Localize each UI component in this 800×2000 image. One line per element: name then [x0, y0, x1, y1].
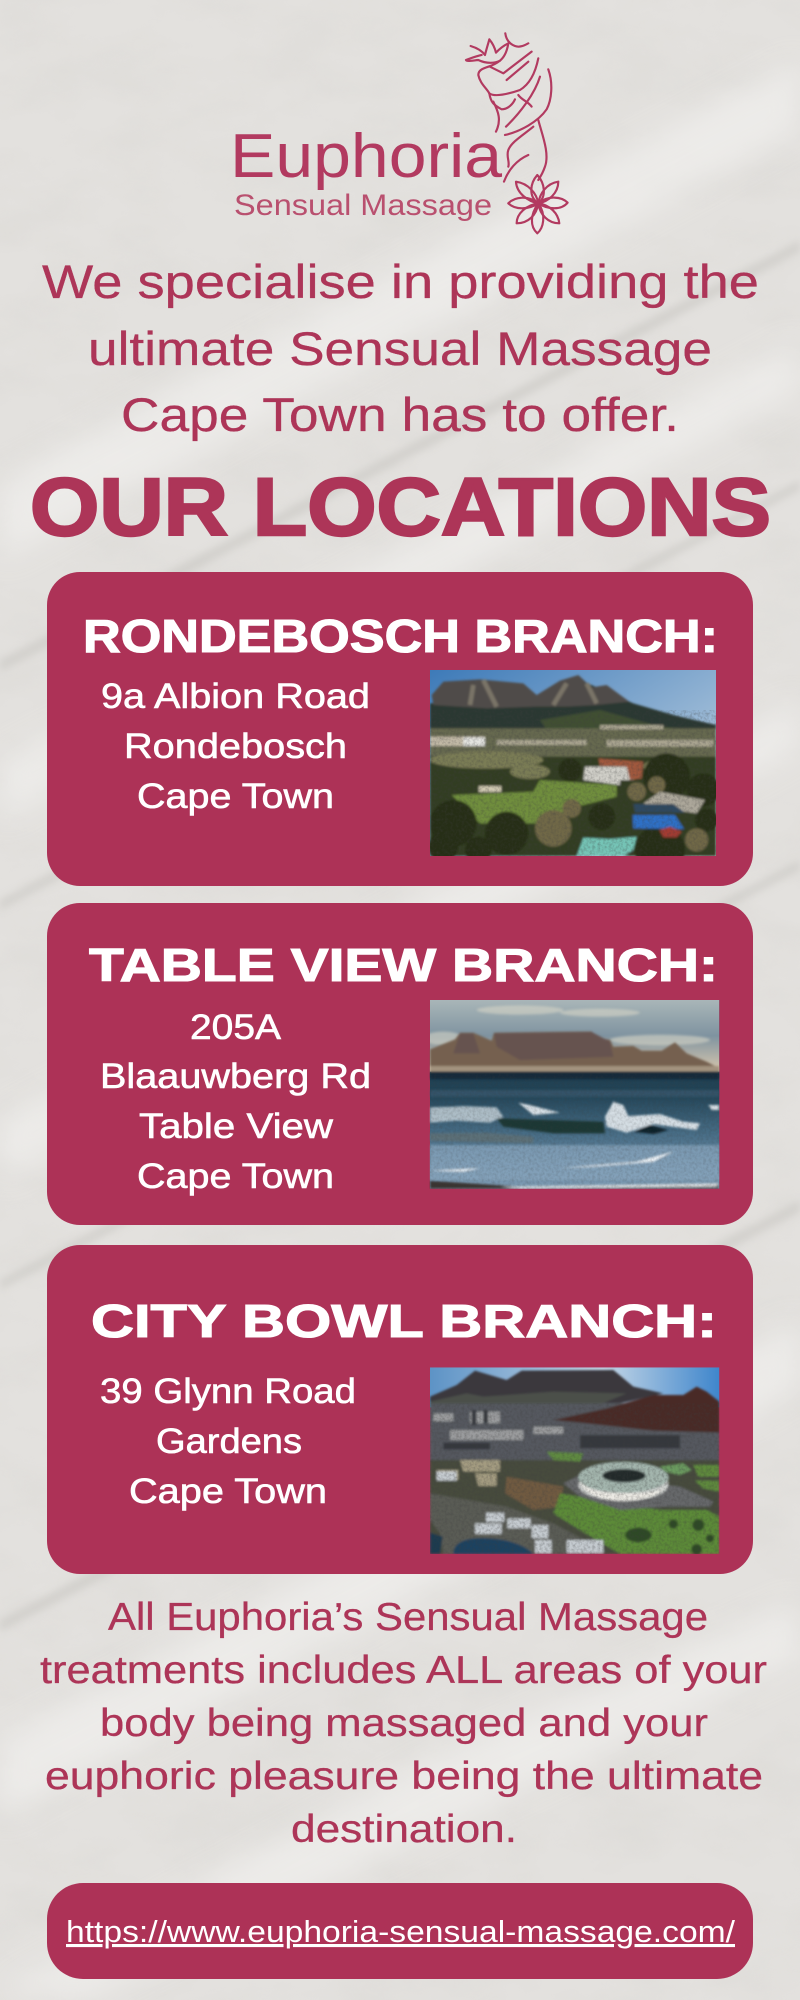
logo — [230, 33, 568, 233]
address: Cape Town — [137, 777, 334, 816]
photo: Cape Town stadium aerial view — [430, 1367, 719, 1555]
closing paragraph: destination. — [291, 1808, 517, 1851]
address: 9a Albion Road — [101, 677, 370, 716]
branch heading: CITY BOWL BRANCH: — [91, 1295, 717, 1347]
intro text — [42, 255, 759, 441]
website link pill — [47, 1883, 753, 1979]
closing paragraph: All Euphoria’s Sensual Massage — [108, 1596, 708, 1639]
address — [100, 1372, 356, 1511]
photo: Rondebosch aerial view — [430, 670, 716, 856]
logo tagline: Sensual Massage — [234, 189, 492, 222]
closing paragraph: body being massaged and your — [100, 1702, 708, 1745]
closing paragraph — [40, 1596, 767, 1851]
panel: Rondebosch branch — [47, 572, 753, 886]
address: Gardens — [156, 1422, 302, 1461]
address — [100, 1008, 371, 1196]
address: Cape Town — [137, 1157, 334, 1196]
logo wordmark: Euphoria — [230, 122, 503, 191]
panel: City Bowl branch — [47, 1245, 753, 1574]
address: 205A — [190, 1008, 282, 1047]
main heading: OUR LOCATIONS — [30, 462, 771, 553]
intro text: We specialise in providing the — [42, 255, 759, 308]
branch heading: RONDEBOSCH BRANCH: — [83, 610, 718, 662]
intro text: ultimate Sensual Massage — [88, 322, 712, 375]
logo figure icon — [466, 33, 568, 233]
address: Table View — [139, 1107, 334, 1146]
address: Cape Town — [129, 1472, 327, 1511]
closing paragraph: euphoric pleasure being the ultimate — [45, 1755, 763, 1798]
address: 39 Glynn Road — [100, 1372, 356, 1411]
panel: Table View branch — [47, 903, 753, 1225]
closing paragraph: treatments includes ALL areas of your — [40, 1649, 767, 1692]
address — [101, 677, 370, 816]
photo: Table Mountain from the sea — [423, 1000, 719, 1189]
branch heading: TABLE VIEW BRANCH: — [89, 939, 718, 991]
address: Rondebosch — [124, 727, 347, 766]
address: Blaauwberg Rd — [100, 1057, 371, 1096]
intro text: Cape Town has to offer. — [121, 388, 679, 441]
website URL: https://www.euphoria-sensual-massage.com/ — [66, 1914, 735, 1949]
